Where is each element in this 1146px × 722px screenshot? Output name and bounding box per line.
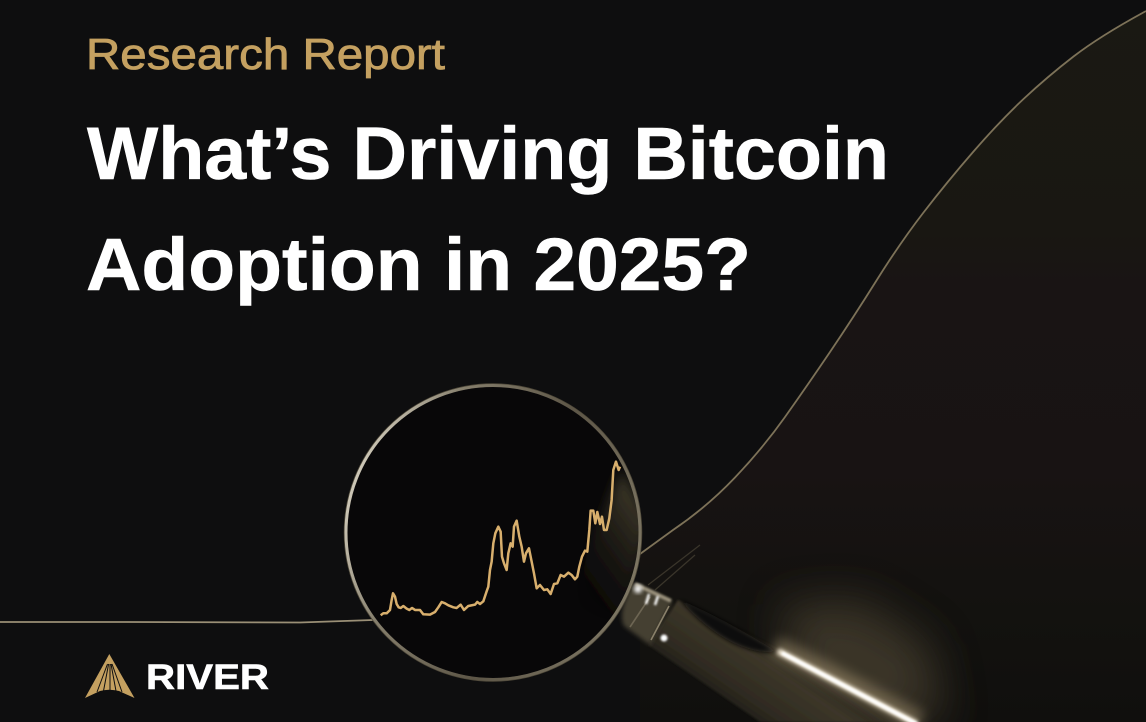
logo: River — [85, 654, 269, 698]
magnifying glass lens — [346, 385, 650, 680]
title: What’s Driving Bitcoin — [87, 112, 889, 195]
icon: river triangle — [85, 654, 134, 698]
wordmark: RIVER — [146, 658, 269, 697]
title: Adoption in 2025? — [86, 223, 751, 306]
subtitle: Research Report: Research Report — [86, 30, 445, 79]
magnifying glass handle — [648, 600, 920, 722]
area under growth curve — [640, 11, 1146, 722]
price chart inside lens — [381, 462, 620, 615]
soft light glow — [780, 600, 945, 722]
magnifying glass ferrule — [622, 545, 700, 645]
title — [86, 112, 889, 306]
